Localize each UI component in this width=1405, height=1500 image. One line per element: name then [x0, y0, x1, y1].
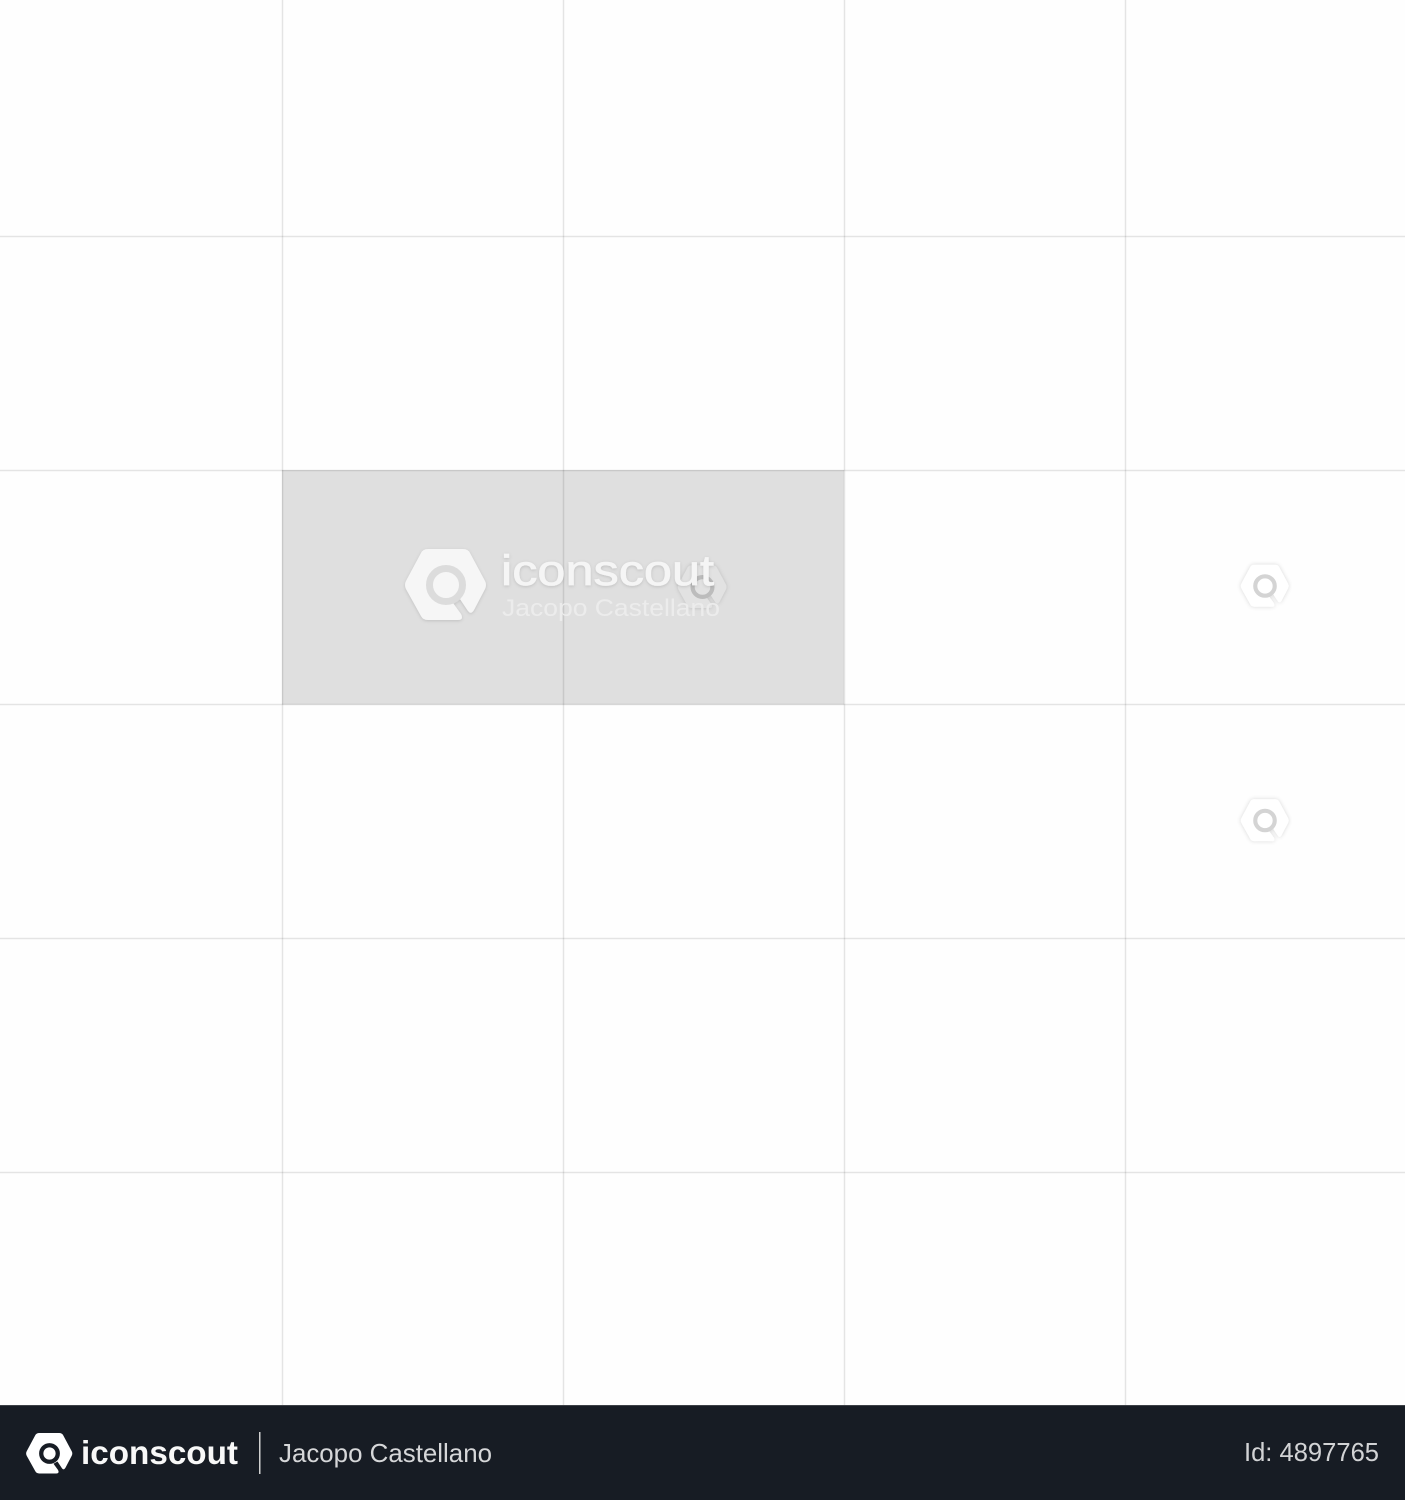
footer logo icon	[26, 1433, 72, 1473]
small watermark icon in grey panel	[678, 565, 726, 608]
footer wordmark: iconscout	[81, 1434, 238, 1471]
watermark icon: hexagon magnifier	[405, 549, 486, 620]
watermark icon: right column lower	[1241, 799, 1289, 841]
footer bar	[0, 1405, 1405, 1500]
footer asset id: Id: 4897765	[1244, 1437, 1379, 1467]
watermark icon: right column upper	[1241, 565, 1289, 607]
watermark author: Jacopo Castellano	[502, 595, 720, 622]
footer author name: Jacopo Castellano	[279, 1438, 492, 1468]
watermark wordmark: iconscout	[501, 547, 714, 595]
main watermark logo	[405, 547, 720, 622]
highlighted grey panel	[282, 470, 844, 704]
footer divider	[259, 1432, 260, 1474]
